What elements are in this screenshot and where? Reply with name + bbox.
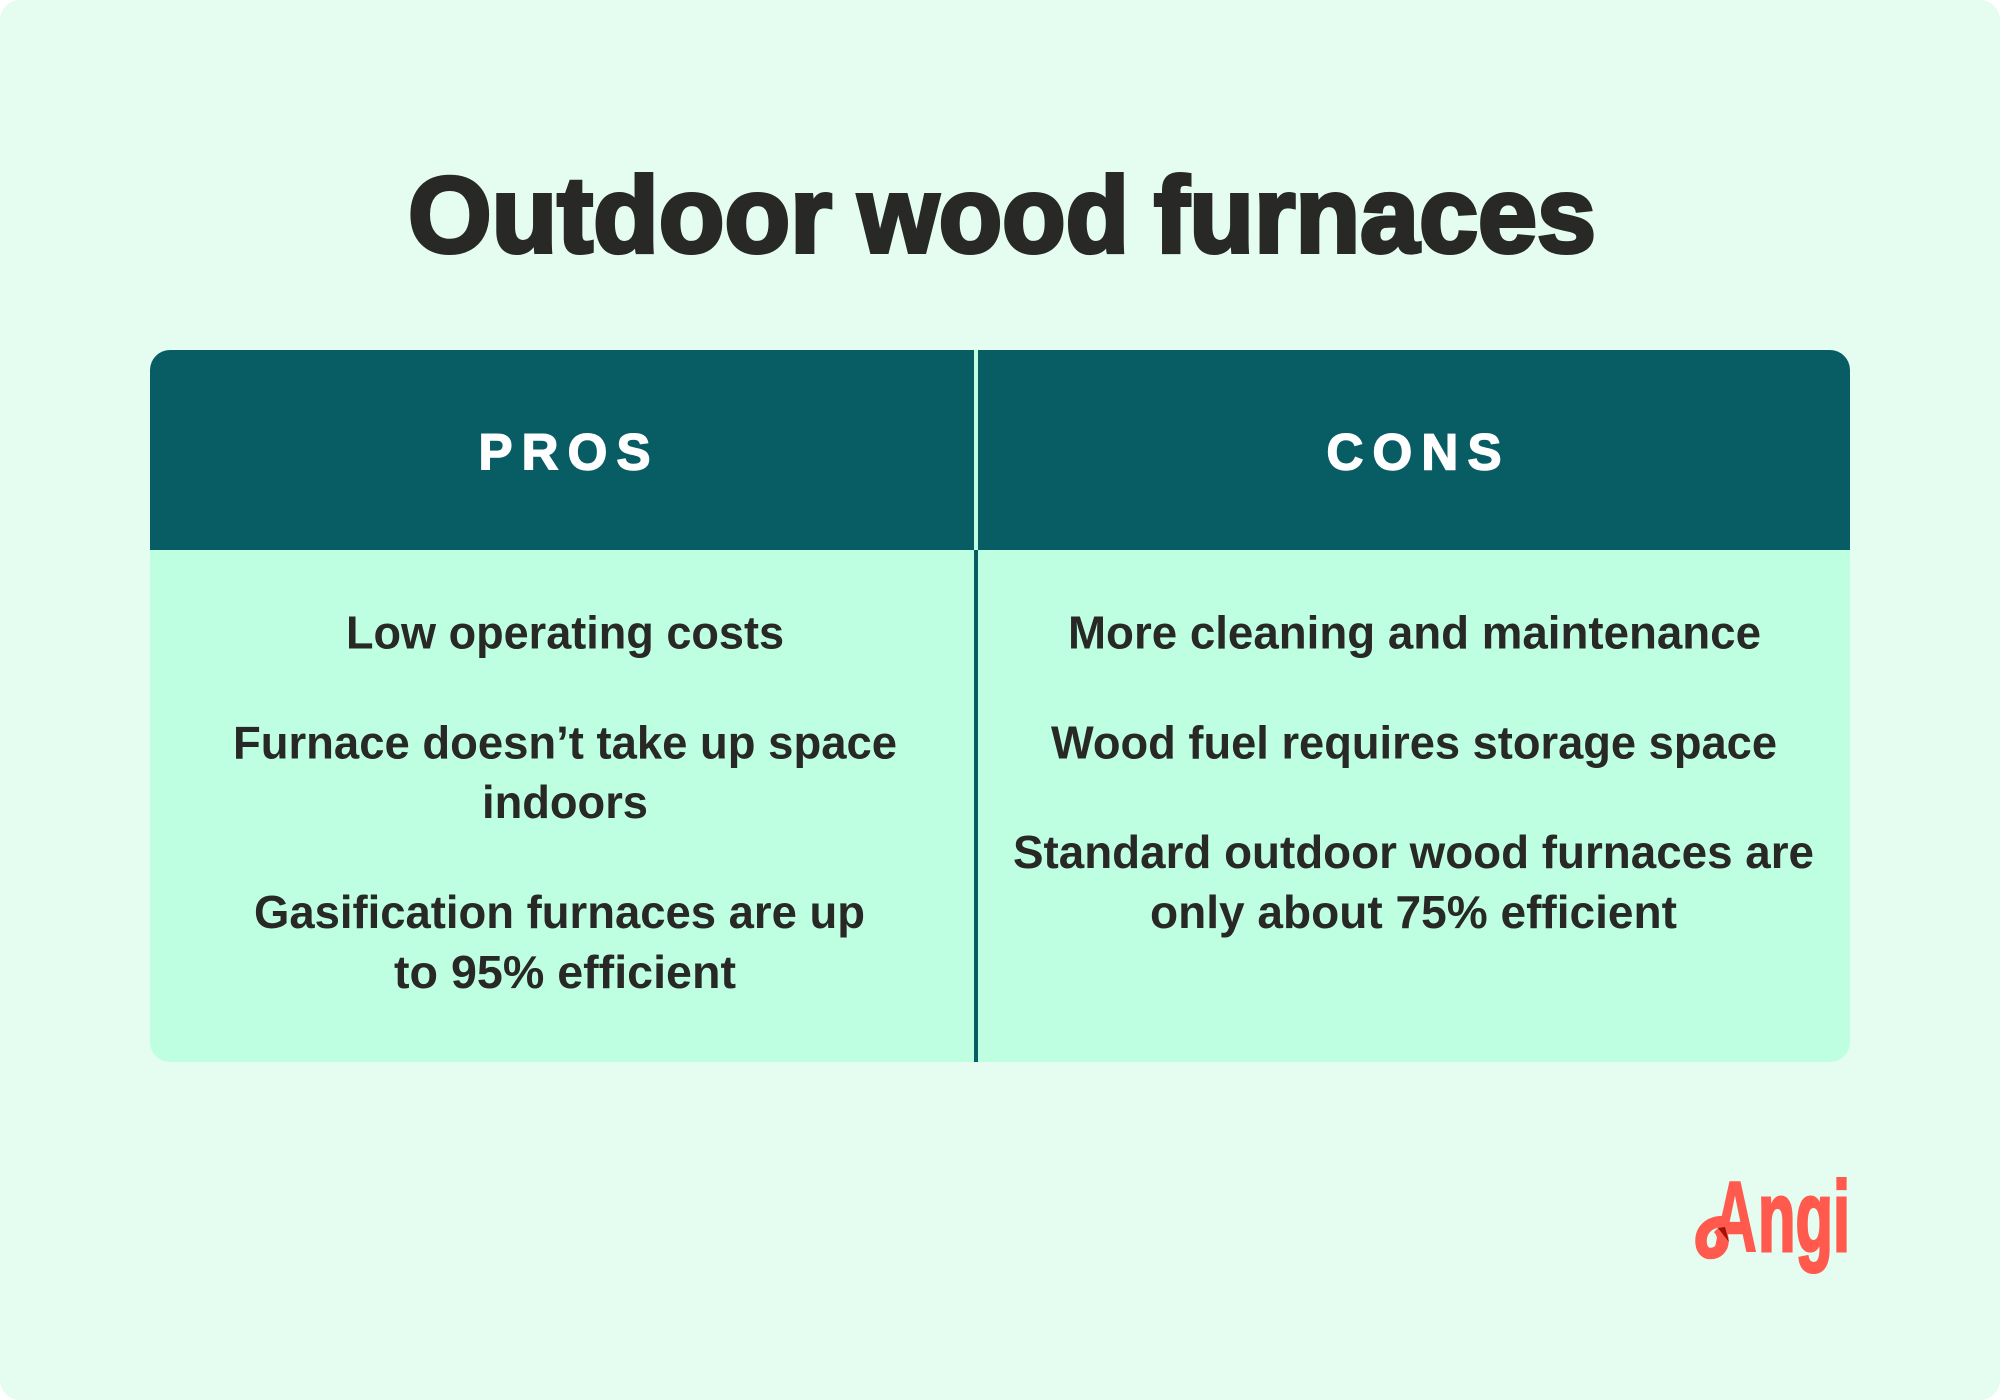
text: gasification efficiency: Gasification furnaces are up xyxy=(254,886,865,938)
text: cleaning and maintenance: More cleaning and maintenance xyxy=(1068,606,1761,658)
logo loop xyxy=(1701,1222,1726,1254)
heading: pros: PROS xyxy=(478,424,650,480)
heading: cons: CONS xyxy=(1326,424,1502,480)
panel: pros header xyxy=(150,350,974,550)
text: furnace indoors: indoors xyxy=(482,776,648,828)
logo letters ngi: ngi xyxy=(1758,1161,1850,1273)
logo: Angi xyxy=(1701,1161,1850,1273)
text: gasification efficiency xyxy=(254,886,865,998)
text: low operating costs: Low operating costs xyxy=(346,606,784,658)
pros and cons table xyxy=(150,350,1850,1062)
title: Outdoor xyxy=(408,154,832,275)
title xyxy=(408,154,1596,275)
text: standard efficiency xyxy=(1013,826,1814,938)
panel: cons header xyxy=(978,350,1850,550)
panel: table body xyxy=(150,350,1850,1062)
text: furnace indoors: Furnace doesn’t take up space xyxy=(233,716,897,768)
text: standard efficiency: Standard outdoor wood furnaces are xyxy=(1013,826,1814,878)
text: standard efficiency: only about 75% efficient xyxy=(1150,886,1677,938)
logo letter A: A xyxy=(1713,1161,1757,1273)
text: storage space: Wood fuel requires storage space xyxy=(1051,716,1777,768)
logo loop fold xyxy=(1718,1227,1729,1242)
text: furnace indoors xyxy=(233,716,897,828)
title: wood xyxy=(857,154,1129,275)
text: gasification efficiency: to 95% efficient xyxy=(394,946,736,998)
title: furnaces xyxy=(1154,154,1596,275)
